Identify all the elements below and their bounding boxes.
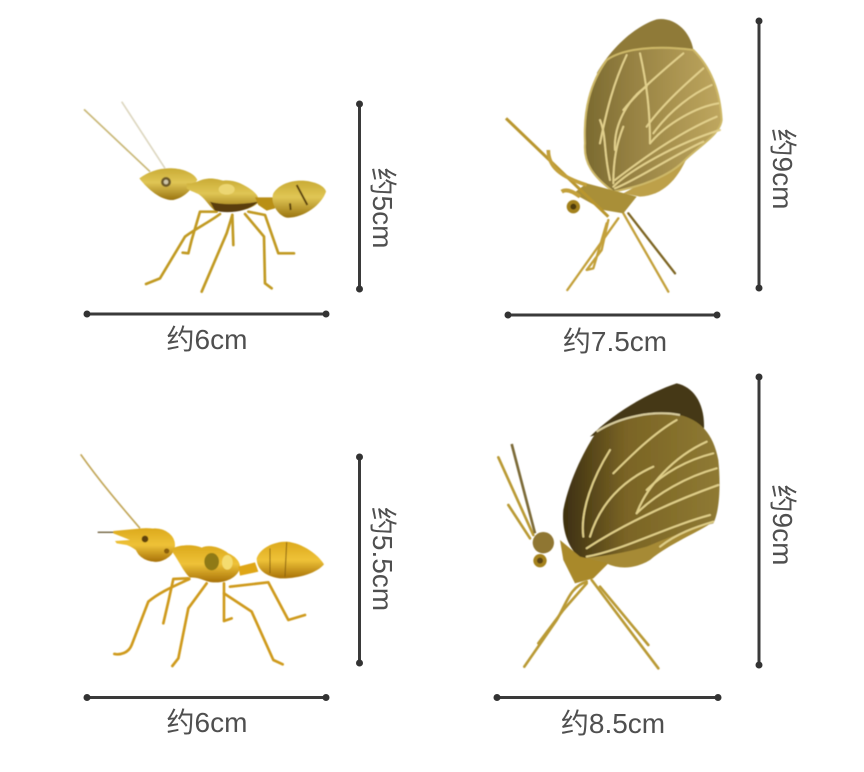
dimension: ant 2 height: 约5.5cm [367,507,398,611]
dimension: butterfly 2 height [756,374,798,668]
dimension: ant 1 width: 约6cm [167,324,247,355]
dimension: ant 2 height [356,454,398,666]
dimension: butterfly 1 height [756,18,798,292]
dimension: ant 1 height [356,100,398,292]
butterfly 1: brass butterfly with pale veined wing [506,19,722,292]
dimension: ant 2 width: 约6cm [167,707,247,738]
dimension: butterfly 2 height: 约9cm [767,485,798,565]
dimension: ant 2 width [84,694,330,738]
dimension: ant 1 width [84,310,330,355]
ant 1: brass ant with two antennae [84,102,326,292]
dimension: butterfly 2 width: 约8.5cm [561,708,665,739]
dimension: ant 1 height: 约5cm [367,168,398,248]
dimension: butterfly 1 width: 约7.5cm [563,326,667,357]
dimension: butterfly 2 width [494,694,722,739]
dimension: butterfly 1 width [504,312,720,357]
butterfly 2: dark brass butterfly with three antennae [498,383,720,668]
dimension: butterfly 1 height: 约9cm [767,129,798,209]
ant 2: brass ant with mandibles and one long antenna [81,454,324,666]
